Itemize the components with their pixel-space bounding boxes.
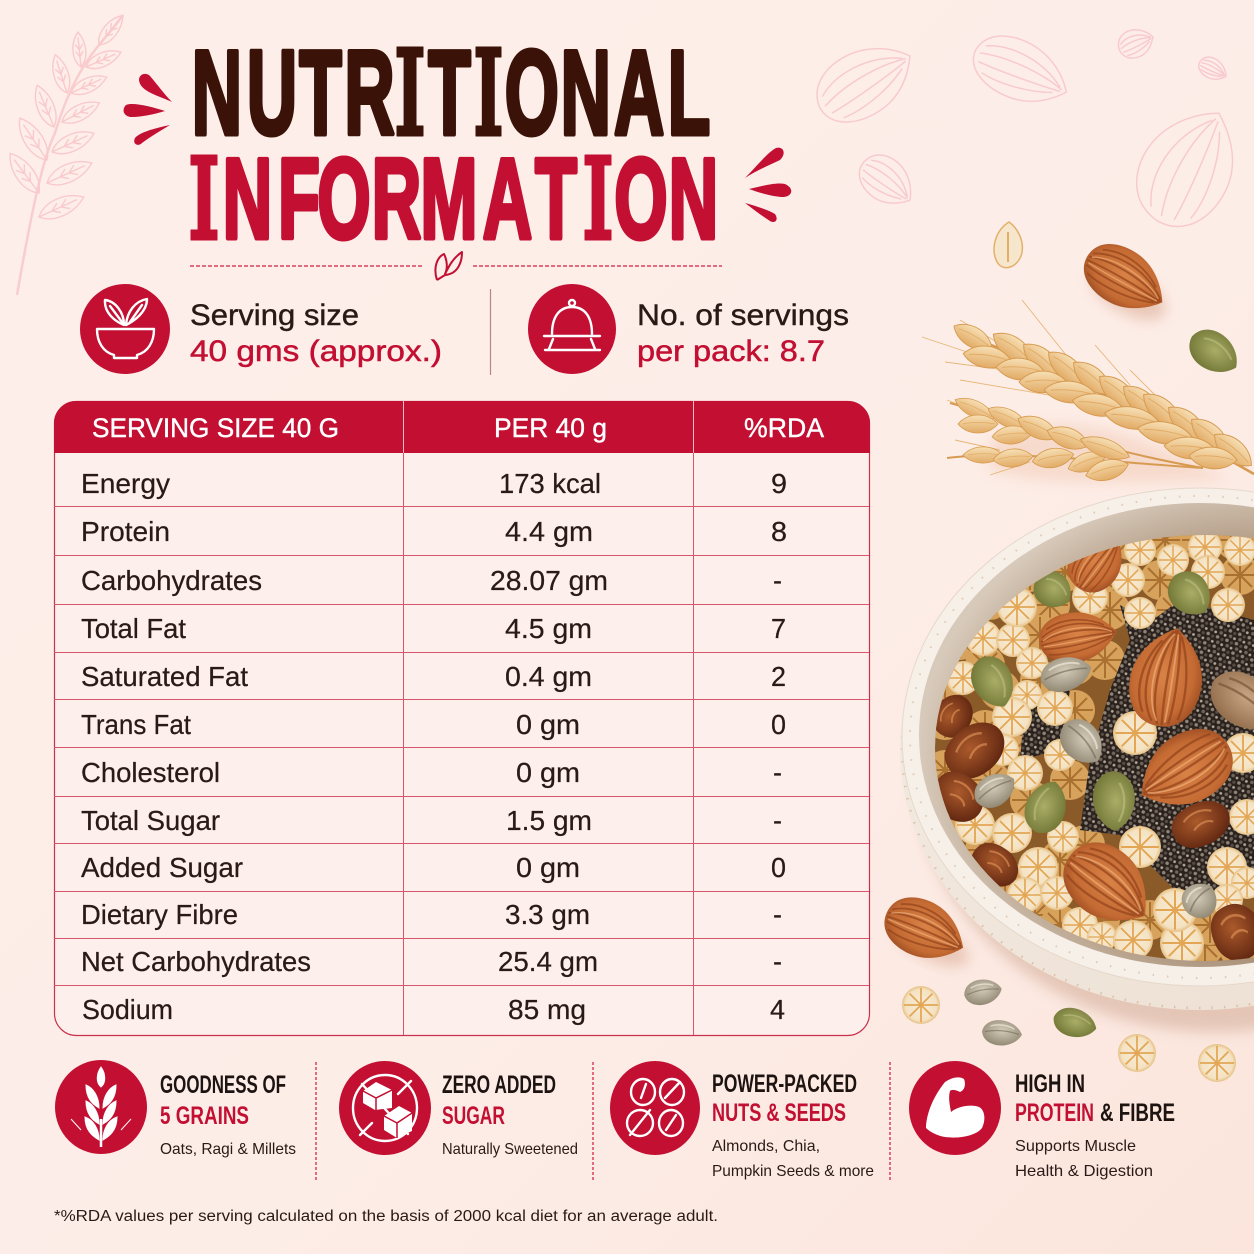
footnote: *%RDA values per serving calculated on the basis of 2000 kcal diet for an average adult.: [54, 1208, 718, 1225]
row: sodium: 85 mg: [508, 994, 586, 1025]
row: dietary fibre: [81, 899, 782, 930]
row: energy: 173 kcal: [499, 468, 601, 499]
wheat ears: [922, 300, 1254, 485]
wheat ear: main: [922, 300, 1254, 474]
serving size value: 40 gms (approx.): [190, 335, 442, 368]
row: carbohydrates: [81, 565, 782, 596]
row: trans fat: [81, 709, 786, 740]
row: total sugar: 1.5 gm: [506, 805, 592, 836]
heading accent: PROTEIN: [1015, 1099, 1094, 1127]
table header: PER 40 g: [494, 413, 607, 443]
row: total sugar: [81, 805, 782, 836]
row: energy: Energy: [81, 468, 170, 499]
row: energy: 9: [771, 468, 787, 499]
row: net carbohydrates: Net Carbohydrates: [81, 946, 311, 977]
heading accent: 5 GRAINS: [160, 1102, 249, 1130]
icon: bowl with sprout: [80, 284, 170, 374]
icon: left splash: [124, 74, 172, 145]
icon: cloche: [528, 284, 616, 374]
icon: four seeds: [610, 1061, 700, 1155]
heading: POWER-PACKED: [712, 1070, 857, 1098]
decorative almond line art: [804, 24, 1254, 243]
loose ingredients: [875, 222, 1247, 1082]
wheat ear: second: [950, 392, 1203, 468]
servings value: per pack: 8.7: [637, 335, 825, 368]
loose oats and seeds: [902, 976, 1236, 1082]
row: saturated fat: [81, 661, 786, 692]
row: net carbohydrates: -: [773, 946, 782, 977]
row: cholesterol: [81, 757, 782, 788]
row: protein: 8: [771, 516, 787, 547]
row: cholesterol: -: [773, 757, 782, 788]
row: sodium: 4: [770, 994, 785, 1025]
row: total fat: 7: [771, 613, 786, 644]
pumpkin seeds: [971, 571, 1216, 918]
row: added sugar: Added Sugar: [81, 852, 243, 883]
icon: right splash: [745, 148, 791, 222]
muesli bowl: [900, 488, 1254, 1032]
row: total fat: Total Fat: [81, 613, 186, 644]
row: added sugar: [81, 852, 786, 883]
serving size block: [80, 284, 442, 374]
bottom left almond: [875, 887, 975, 975]
row: cholesterol: 0 gm: [516, 757, 580, 788]
row: total sugar: Total Sugar: [81, 805, 220, 836]
title line: information: INFORMATION: [194, 135, 718, 262]
row: dietary fibre: 3.3 gm: [505, 899, 590, 930]
pumpkin seed top: [1181, 321, 1247, 383]
title: [191, 25, 718, 262]
nutrition table: [54, 401, 870, 1036]
row: protein: 4.4 gm: [505, 516, 593, 547]
description: Naturally Sweetened: [442, 1141, 578, 1158]
row: dietary fibre: -: [773, 899, 782, 930]
icon: crossed sugar cubes: [339, 1061, 431, 1155]
table header: SERVING SIZE 40 G: [92, 413, 339, 443]
almond top: [1073, 232, 1177, 331]
benefit: nuts and seeds: [610, 1061, 874, 1180]
icon: wheat: [55, 1060, 147, 1154]
hazelnuts: [923, 688, 1254, 968]
chia seeds: [1020, 600, 1254, 905]
row: sodium: Sodium: [82, 994, 173, 1025]
bowl contents: [923, 520, 1254, 970]
servings block: [490, 284, 849, 375]
oat flakes: [946, 530, 1254, 965]
description: Oats, Ragi & Millets: [160, 1141, 296, 1158]
row: protein: Protein: [81, 516, 170, 547]
row: trans fat: 0: [771, 709, 786, 740]
row: carbohydrates: Carbohydrates: [81, 565, 262, 596]
heading accent: NUTS & SEEDS: [712, 1099, 846, 1127]
table header: %RDA: [744, 413, 824, 443]
row: trans fat: 0 gm: [516, 709, 580, 740]
benefit: five grains: [55, 1060, 296, 1158]
heading tail: & FIBRE: [1100, 1099, 1175, 1127]
row: net carbohydrates: 25.4 gm: [498, 946, 598, 977]
description: Supports Muscle: [1015, 1138, 1136, 1155]
table header: [54, 401, 870, 453]
description: Almonds, Chia,: [712, 1138, 820, 1155]
benefit: protein and fibre: [909, 1061, 1175, 1180]
row: saturated fat: Saturated Fat: [81, 661, 248, 692]
heading: ZERO ADDED: [442, 1071, 556, 1099]
row: carbohydrates: -: [773, 565, 782, 596]
row: trans fat: Trans Fat: [81, 709, 191, 740]
tan almond: [1210, 671, 1254, 730]
wheat ear: third: [947, 400, 1203, 485]
icon: leaf: [435, 252, 462, 280]
heading: HIGH IN: [1015, 1070, 1085, 1098]
decorative wheat branch line art: [3, 11, 128, 295]
description line two: Health & Digestion: [1015, 1163, 1153, 1180]
divider with leaf: [190, 252, 722, 280]
heading accent: SUGAR: [442, 1102, 505, 1130]
row: sodium: [82, 994, 785, 1025]
benefit: zero sugar: [339, 1061, 578, 1158]
heading: GOODNESS OF: [160, 1071, 286, 1099]
row: total fat: 4.5 gm: [505, 613, 592, 644]
icon: flexed arm: [909, 1061, 1001, 1155]
row: total sugar: -: [773, 805, 782, 836]
oat flake: [994, 222, 1022, 268]
almonds: [1039, 546, 1233, 920]
row: added sugar: 0 gm: [516, 852, 580, 883]
row: saturated fat: 2: [771, 661, 786, 692]
row: added sugar: 0: [771, 852, 786, 883]
row: total fat: [81, 613, 786, 644]
title line: nutritional: NUTRITIONAL: [192, 25, 710, 160]
row: saturated fat: 0.4 gm: [505, 661, 592, 692]
serving size text: Serving size: [190, 299, 359, 332]
row: carbohydrates: 28.07 gm: [490, 565, 608, 596]
row: cholesterol: Cholesterol: [81, 757, 220, 788]
row: net carbohydrates: [81, 946, 782, 977]
servings text: No. of servings: [637, 299, 849, 332]
row: dietary fibre: Dietary Fibre: [81, 899, 238, 930]
under layer of flakes: [925, 520, 1254, 970]
row: protein: [81, 516, 787, 547]
description line two: Pumpkin Seeds & more: [712, 1163, 874, 1180]
row: energy: [81, 468, 787, 499]
